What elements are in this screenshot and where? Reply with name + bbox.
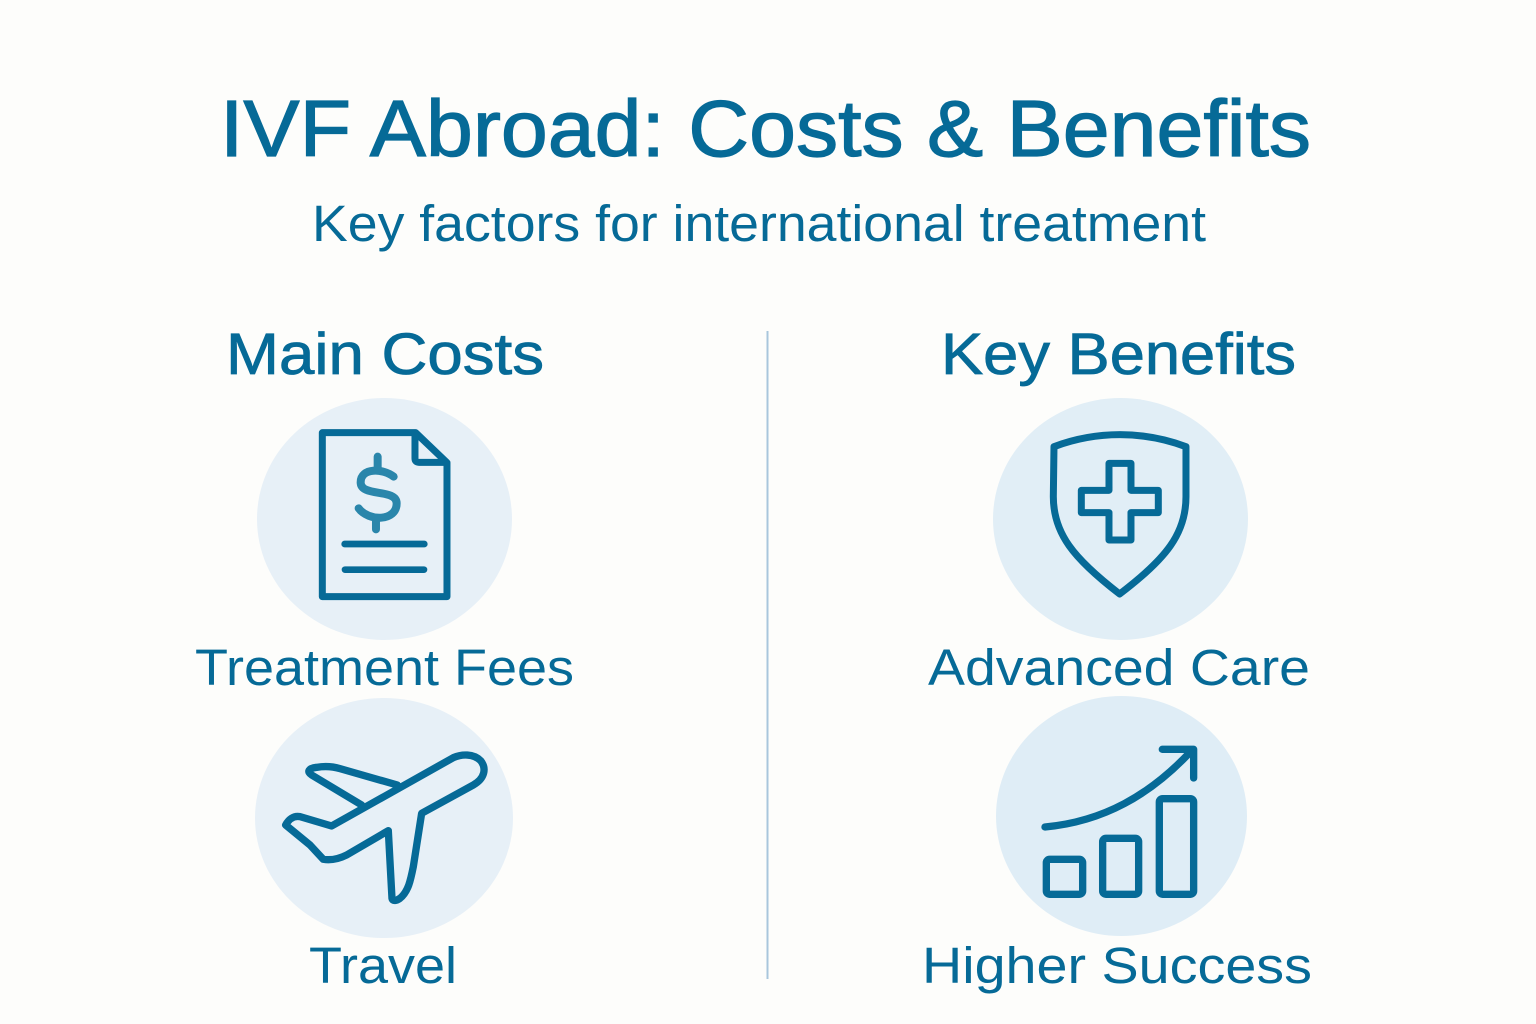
label: travel: Travel <box>309 937 457 994</box>
item: treatment fees <box>195 398 574 696</box>
title: IVF Abroad: Costs & Benefits <box>220 84 1311 173</box>
label: advanced care: Advanced Care <box>928 639 1310 696</box>
item: higher success <box>922 696 1312 994</box>
item: advanced care <box>928 398 1310 696</box>
panel: key benefits <box>922 322 1312 994</box>
icon: airplane <box>255 698 513 938</box>
panel: main costs <box>195 322 574 994</box>
subtitle: Key factors for international treatment <box>312 195 1206 252</box>
icon: shield with medical cross <box>993 398 1248 640</box>
icon: invoice document with dollar sign <box>257 398 512 640</box>
heading: main costs: Main Costs <box>226 322 544 387</box>
divider between columns <box>766 331 768 979</box>
icon: rising bar chart with arrow <box>996 696 1247 936</box>
heading: key benefits: Key Benefits <box>941 322 1296 387</box>
item: travel <box>255 698 513 994</box>
label: treatment fees: Treatment Fees <box>195 639 574 696</box>
label: higher success: Higher Success <box>922 937 1312 994</box>
